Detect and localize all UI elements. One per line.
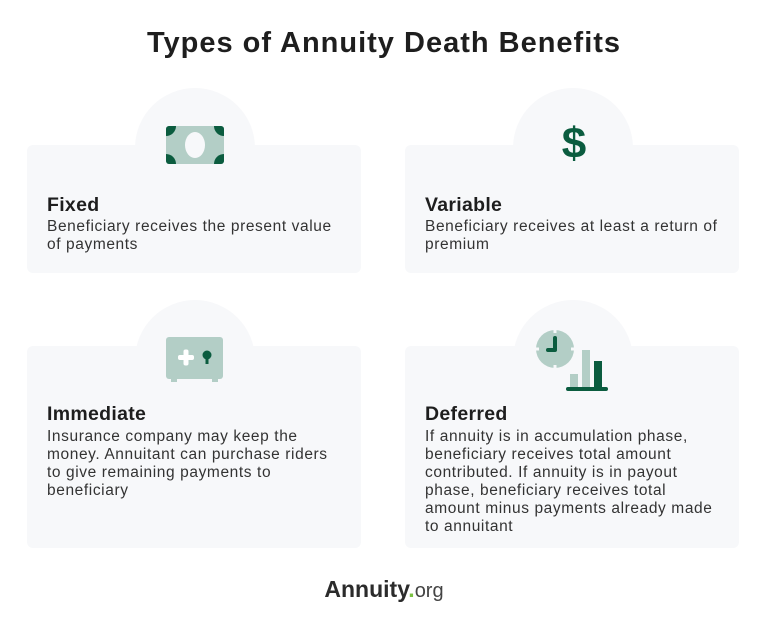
panel: fixed	[27, 145, 361, 273]
heading: immediate: Immediate	[47, 403, 146, 425]
bump: fixed	[135, 88, 255, 208]
text: immediate: beneficiary	[47, 482, 129, 499]
text: variable	[425, 218, 718, 253]
text: deferred: phase, beneficiary receives total	[425, 482, 666, 499]
bump: deferred	[513, 300, 633, 420]
text: immediate: money. Annuitant can purchase riders	[47, 446, 328, 463]
text: deferred: If annuity is in accumulation phase,	[425, 428, 688, 445]
text: fixed: of payments	[47, 236, 138, 253]
text: variable: premium	[425, 236, 490, 253]
text: immediate: Insurance company may keep the	[47, 428, 298, 445]
icon: money	[166, 126, 224, 164]
text: deferred	[425, 428, 712, 535]
text: variable: Beneficiary receives at least a return of	[425, 218, 718, 235]
panel: variable	[405, 145, 739, 273]
heading: deferred: Deferred	[425, 403, 508, 425]
text: deferred: contributed. If annuity is in payout	[425, 464, 678, 481]
text: fixed	[47, 218, 332, 253]
logo: Annuity.org	[324, 576, 444, 602]
panel: immediate	[27, 346, 361, 548]
bump: variable	[513, 88, 633, 208]
panel: deferred	[405, 346, 739, 548]
icon: clock and bars	[536, 330, 608, 391]
text: fixed: Beneficiary receives the present value	[47, 218, 332, 235]
text: immediate: to give remaining payments to	[47, 464, 271, 481]
text: deferred: to annuitant	[425, 518, 513, 535]
icon: dollar: $	[562, 119, 586, 168]
text: immediate	[47, 428, 328, 499]
title: Types of Annuity Death Benefits	[147, 27, 621, 59]
bump: immediate	[135, 300, 255, 420]
icon: safe	[166, 337, 223, 382]
heading: fixed: Fixed	[47, 194, 99, 216]
text: deferred: beneficiary receives total amount	[425, 446, 671, 463]
text: deferred: amount minus payments already made	[425, 500, 712, 517]
heading: variable: Variable	[425, 194, 502, 216]
